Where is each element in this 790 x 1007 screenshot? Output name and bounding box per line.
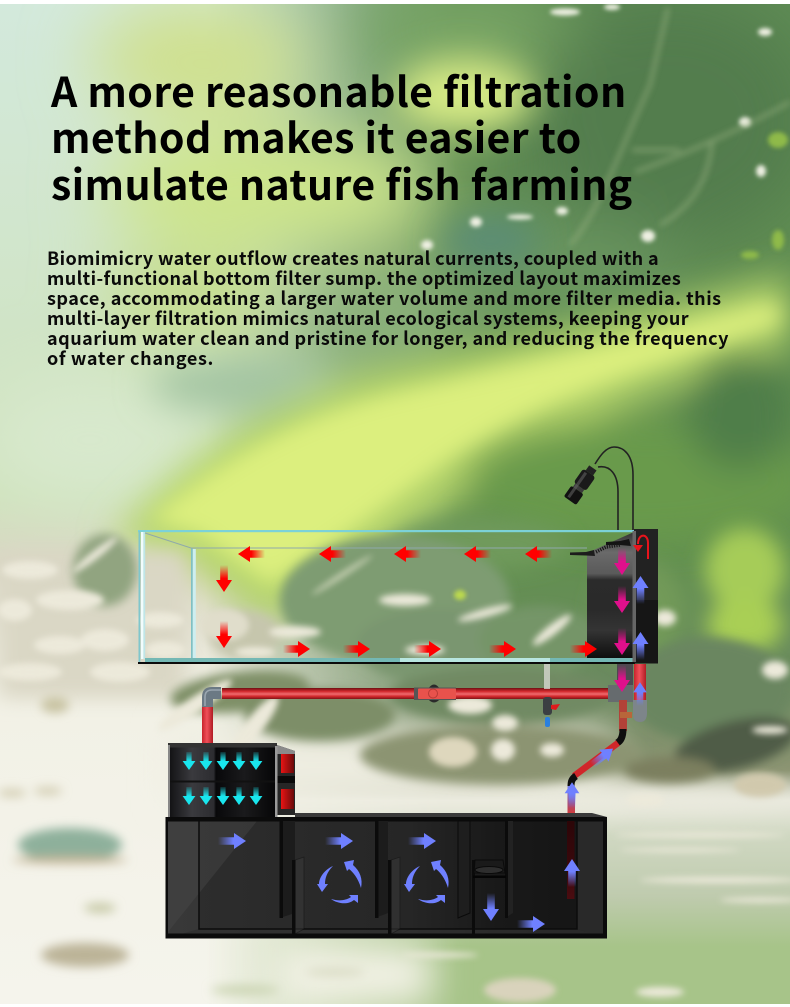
title: method makes it easier to (51, 105, 582, 165)
circulating arrows left (317, 860, 362, 903)
ball valve (414, 684, 456, 702)
title: A more reasonable filtration (51, 59, 627, 119)
circulating arrows right (404, 860, 449, 903)
aquarium light with cables (564, 447, 633, 530)
body text: space, accommodating a larger water volume and more filter media. this (47, 284, 722, 310)
cyan down arrows (183, 752, 262, 805)
pipe flow arrows (565, 665, 647, 808)
body text: Biomimicry water outflow creates natural currents, coupled with a (47, 244, 659, 270)
body text (47, 244, 729, 370)
body text: aquarium water clean and pristine for longer, and reducing the frequency (47, 324, 729, 350)
title: simulate nature fish farming (51, 152, 633, 212)
stacked filter boxes (168, 743, 295, 817)
body text: multi-functional bottom filter sump. the optimized layout maximizes (47, 264, 681, 290)
body text: multi-layer filtration mimics natural ecological systems, keeping your (47, 304, 689, 330)
overflow flow arrows (614, 536, 648, 660)
right-hand plumbing (568, 664, 647, 817)
blue flow arrows in sump (218, 833, 580, 932)
glass tank (138, 530, 635, 664)
title (50, 59, 633, 212)
body text: of water changes. (47, 344, 214, 370)
drain tap (543, 664, 560, 727)
red flow arrows in tank (216, 546, 597, 657)
sump tank (166, 813, 607, 938)
return pipe with elbow (202, 687, 610, 744)
overflow box with back panel (570, 529, 658, 664)
